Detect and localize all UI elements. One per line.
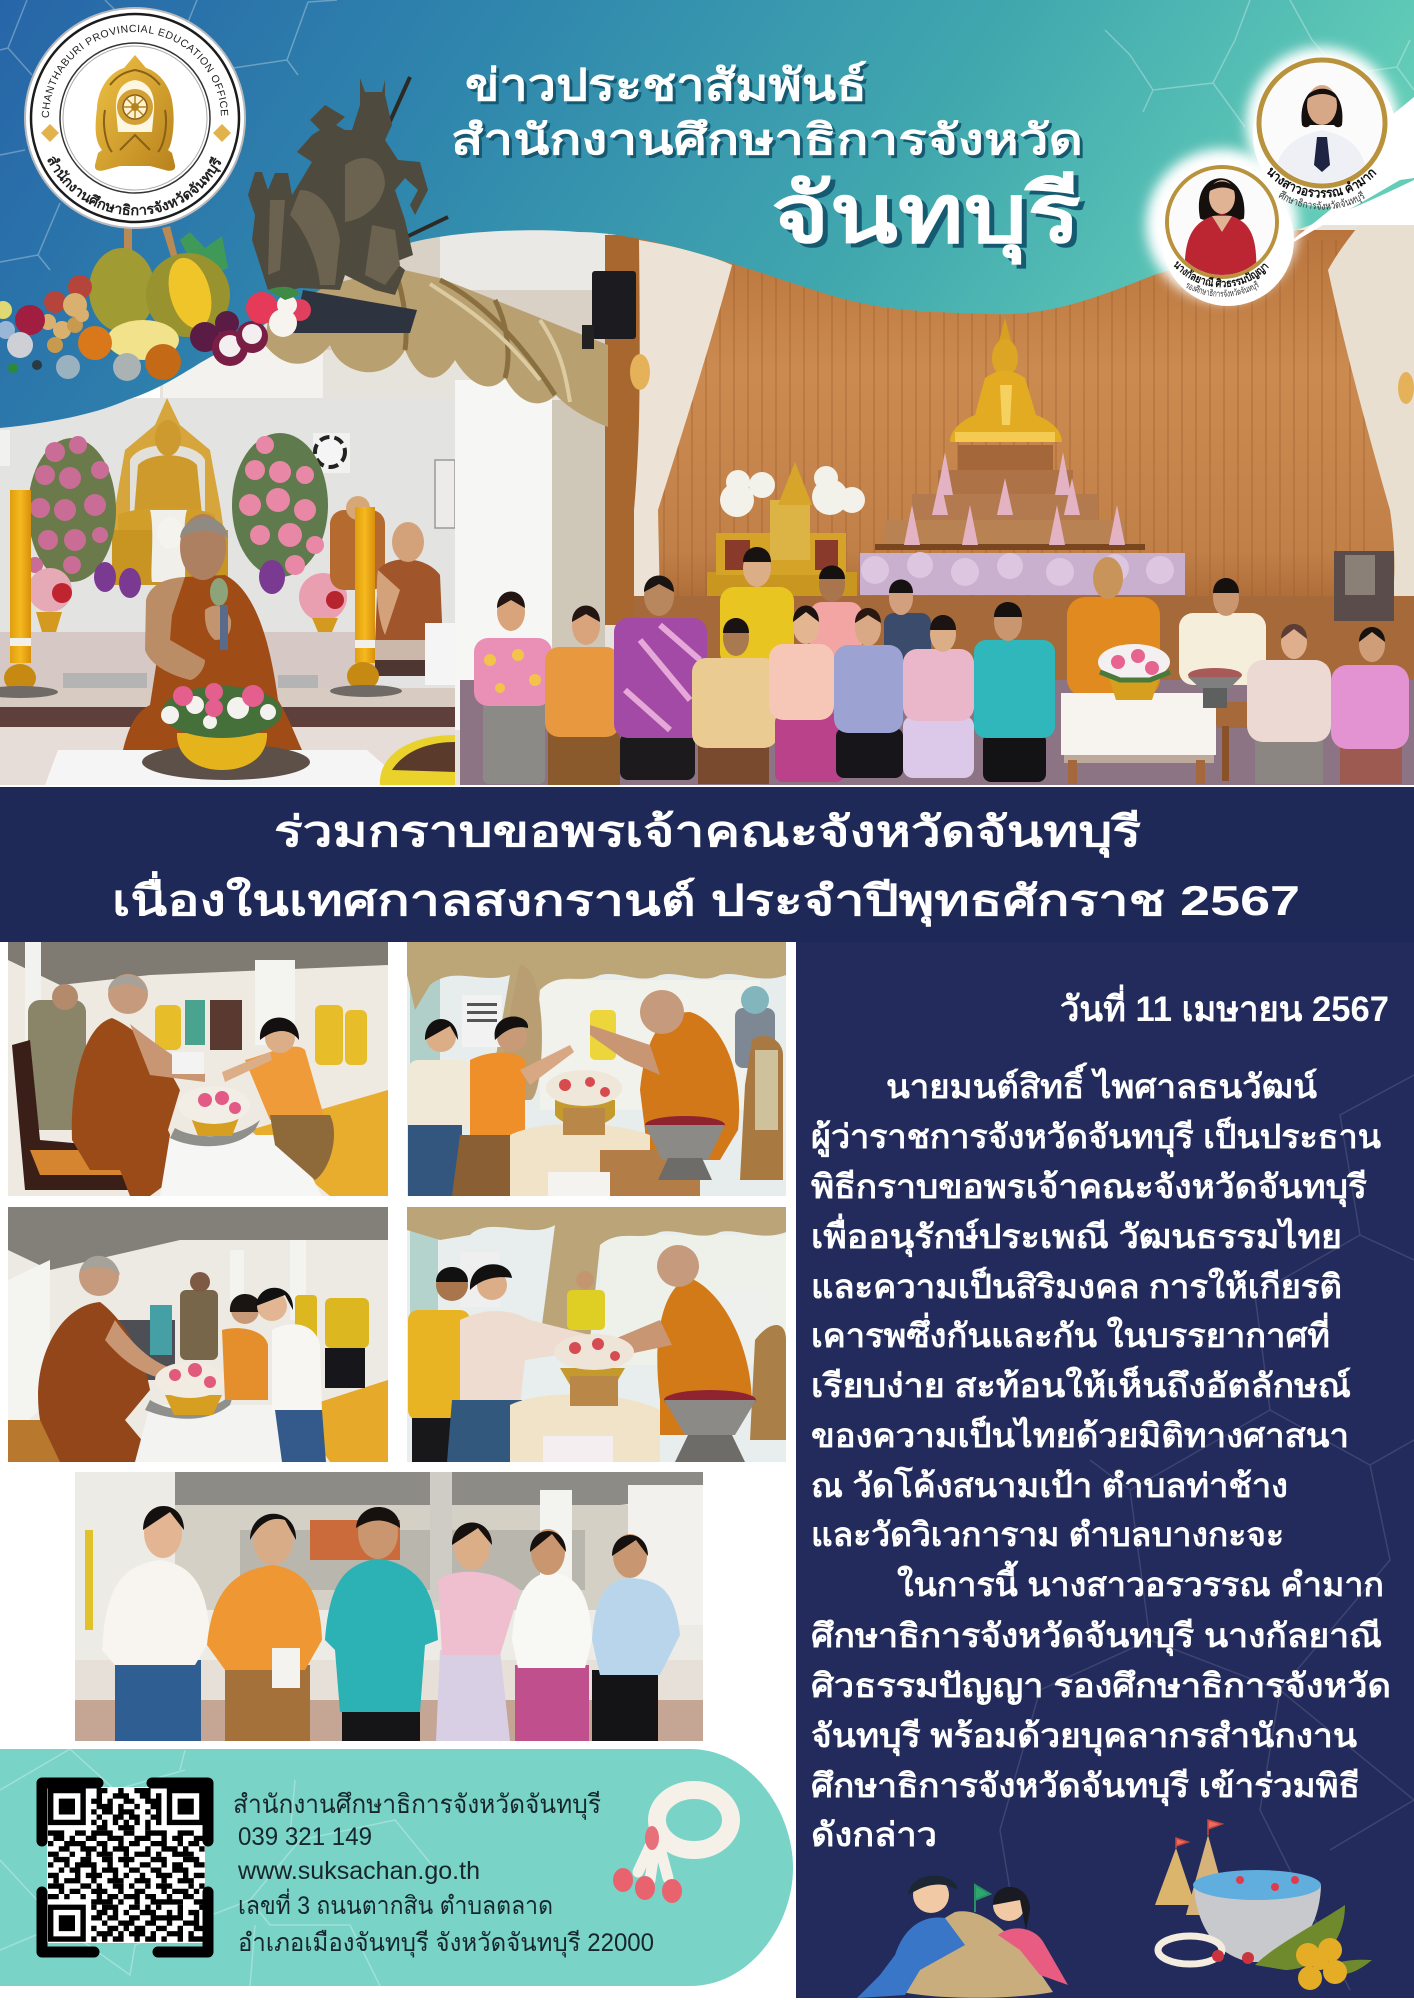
- person 2 orange blouse: [207, 1514, 322, 1741]
- longkong and nuts: [40, 275, 92, 353]
- photo 1: monk and orange blouse: [8, 942, 388, 1196]
- title: header text: [451, 60, 1086, 269]
- monk photo: [0, 398, 455, 785]
- person 2: [545, 606, 620, 785]
- contact text: อำเภอเมืองจันทบุรี จังหวัดจันทบุรี 22000: [238, 1929, 654, 1958]
- golden Buddha: [950, 318, 1062, 442]
- caption: deputy name: รองศึกษาธิการจังหวัดจันทบุรี: [1186, 280, 1259, 297]
- silver bowl: [645, 1116, 725, 1180]
- article body: และวัดวิเวการาม ตำบลบางกะจะ: [811, 1516, 1284, 1553]
- hexagon pattern header: [0, 0, 1414, 270]
- pink flowers left: [27, 436, 116, 582]
- table and basin: [45, 735, 455, 785]
- marble counter: [0, 632, 455, 785]
- altar steps: [875, 445, 1145, 550]
- photo 4: monk blessing woman: [407, 1207, 786, 1462]
- QR code: [42, 1783, 208, 1952]
- caption: deputy name: นางกัลยาณี ศิวธรรมปัญญา: [1174, 261, 1269, 288]
- table right: [1216, 702, 1248, 781]
- person 6: [810, 566, 862, 658]
- caption: director name: นางสาวอรวรรณ คำมาก: [1267, 168, 1377, 198]
- title: header text: ข่าวประชาสัมพันธ์: [468, 63, 870, 113]
- person 14: [1247, 624, 1331, 784]
- bouquets: [28, 568, 347, 632]
- stage floor: [460, 551, 1414, 785]
- right hall curtain: [1328, 225, 1414, 596]
- banner headline: [112, 808, 1300, 927]
- person 10: [903, 615, 974, 778]
- portrait halos: [1146, 47, 1414, 306]
- silver bowl: [664, 1390, 756, 1462]
- candles: [0, 490, 402, 698]
- left hall curtain: [634, 240, 732, 605]
- caption: director name: ศึกษาธิการจังหวัดจันทบุรี: [1278, 190, 1364, 210]
- article body: ศึกษาธิการจังหวัดจันทบุรี นางกัลยาณี: [811, 1617, 1382, 1657]
- person 13: [1179, 578, 1266, 685]
- logo ring text: [42, 24, 228, 216]
- portrait: deputy director: [1165, 167, 1279, 280]
- fruits and gems: [0, 226, 311, 381]
- contact text: www.suksachan.go.th: [237, 1857, 480, 1885]
- education office logo: [24, 7, 246, 229]
- article body: จันทบุรี พร้อมด้วยบุคลากรสำนักงาน: [811, 1717, 1357, 1757]
- statue base: [293, 290, 417, 333]
- banner headline: ร่วมกราบขอพรเจ้าคณะจังหวัดจันทบุรี: [274, 808, 1142, 858]
- header wave background: [0, 0, 1414, 428]
- article body: ของความเป็นไทยด้วยมิติทางศาสนา: [811, 1415, 1349, 1454]
- hexagon lines: [0, 1749, 440, 1986]
- wall lamps: [630, 354, 1414, 404]
- crest emblem: [95, 55, 175, 171]
- person 11: [974, 602, 1055, 782]
- title: header text: ข่าวประชาสัมพันธ์: [465, 60, 867, 110]
- banner headline: เนื่องในเทศกาลสงกรานต์ ประจำปีพุทธศักราช 2567: [112, 871, 1300, 927]
- mangosteen and rambutan: [190, 287, 311, 366]
- person 9: [834, 608, 903, 778]
- logo diamonds: [41, 124, 231, 142]
- person 15: [1331, 627, 1409, 784]
- gold bowl with flowers: [1098, 644, 1170, 700]
- title: header text: สำนักงานศึกษาธิการจังหวัด: [454, 119, 1086, 166]
- jasmine garland: [613, 1790, 731, 1903]
- illustration: songkran bowl and pagodas: [1155, 1820, 1372, 1990]
- article body: ผู้ว่าราชการจังหวัดจันทบุรี เป็นประธาน: [811, 1116, 1381, 1158]
- article body: เพื่ออนุรักษ์ประเพณี วัฒนธรรมไทย: [811, 1213, 1342, 1258]
- photo 3: monk and women: [8, 1207, 388, 1462]
- gems: [0, 301, 181, 381]
- hero statue: [248, 77, 448, 333]
- horse and riders: [248, 78, 428, 295]
- wall fans and frame: [0, 430, 455, 528]
- article body: ศึกษาธิการจังหวัดจันทบุรี เข้าร่วมพิธี: [811, 1767, 1360, 1807]
- flower bowl: [142, 683, 310, 780]
- person 4 pink blouse: [436, 1522, 520, 1741]
- person 3: [614, 576, 707, 780]
- article body: ในการนี้ นางสาวอรวรรณ คำมาก: [897, 1560, 1384, 1603]
- person 5 white blouse: [512, 1529, 592, 1741]
- article body: ศิวธรรมปัญญา รองศึกษาธิการจังหวัด: [811, 1667, 1391, 1705]
- logo ring text: CHANTHABURI PROVINCIAL EDUCATION OFFICE: [42, 24, 228, 118]
- portrait: provincial education director: [1258, 60, 1388, 190]
- article body: เรียบง่าย สะท้อนให้เห็นถึงอัตลักษณ์: [811, 1365, 1351, 1404]
- white table: [1061, 693, 1216, 784]
- date: วันที่ 11 เมษายน 2567: [1060, 984, 1389, 1029]
- person 5: [692, 618, 778, 784]
- paper stack: [425, 623, 455, 685]
- gold altar table with white flowers: [707, 462, 865, 596]
- lilac flower strip: [860, 552, 1185, 595]
- contact text: สำนักงานศึกษาธิการจังหวัดจันทบุรี: [233, 1789, 601, 1820]
- logo ring text: สำนักงานศึกษาธิการจังหวัดจันทบุรี: [48, 156, 222, 216]
- title: header text: จันทบุรี: [771, 169, 1081, 265]
- person 6 blue floral shirt: [592, 1534, 680, 1741]
- illustration: children building sand pagoda: [857, 1876, 1068, 1998]
- person 1 white blouse: [102, 1506, 210, 1741]
- person 7: [769, 606, 844, 782]
- person 4: [720, 547, 794, 667]
- chair: [740, 1036, 783, 1180]
- durian: [89, 226, 230, 337]
- speaker: [582, 271, 636, 349]
- hexagon lines: [1000, 1075, 1414, 1990]
- article body: พิธีกราบขอพรเจ้าคณะจังหวัดจันทบุรี: [811, 1168, 1367, 1208]
- article panel: [796, 942, 1414, 1998]
- white drapes: [163, 345, 323, 400]
- monk: [1067, 557, 1160, 697]
- photo 2: monk seated with offering: [407, 942, 786, 1196]
- title: header text: จันทบุรี: [776, 173, 1086, 269]
- hall group photo: [160, 170, 1414, 785]
- seated monk statues: [330, 496, 443, 676]
- durian flesh: [107, 320, 179, 360]
- article body: ดังกล่าว: [811, 1816, 937, 1853]
- pink flowers right: [232, 433, 328, 577]
- people row: [474, 547, 1409, 785]
- article body: และความเป็นสิริมงคล การให้เกียรติ: [811, 1266, 1342, 1305]
- purple orchid: [94, 560, 285, 598]
- person 1: [474, 592, 552, 784]
- Buddha statue: [112, 398, 228, 585]
- contact text: 039 321 149: [238, 1823, 372, 1851]
- article body: เคารพซึ่งกันและกัน ในบรรยากาศที่: [811, 1312, 1330, 1354]
- spear and sword: [383, 77, 448, 240]
- contact panel: [0, 1749, 793, 1986]
- article body: นายมนต์สิทธิ์ ไพศาลธนวัฒน์: [886, 1062, 1317, 1105]
- contact text: [233, 1789, 654, 1958]
- golden valance: [265, 268, 608, 427]
- caption: director name: [1267, 168, 1377, 210]
- person 3 teal shirt: [325, 1507, 438, 1741]
- photo 5: group portrait: [75, 1472, 703, 1741]
- article body: ณ วัดโค้งสนามเป้า ตำบลท่าช้าง: [811, 1466, 1288, 1504]
- title banner: [0, 787, 1414, 942]
- person 8: [884, 580, 931, 659]
- pink offerings: [904, 452, 1125, 545]
- article body: [811, 1062, 1391, 1853]
- contact text: เลขที่ 3 ถนนตากสิน ตำบลตลาด: [238, 1888, 553, 1920]
- title: header text: สำนักงานศึกษาธิการจังหวัด: [451, 116, 1083, 163]
- silver bowl: [1188, 668, 1242, 708]
- monk speaking: [123, 514, 302, 750]
